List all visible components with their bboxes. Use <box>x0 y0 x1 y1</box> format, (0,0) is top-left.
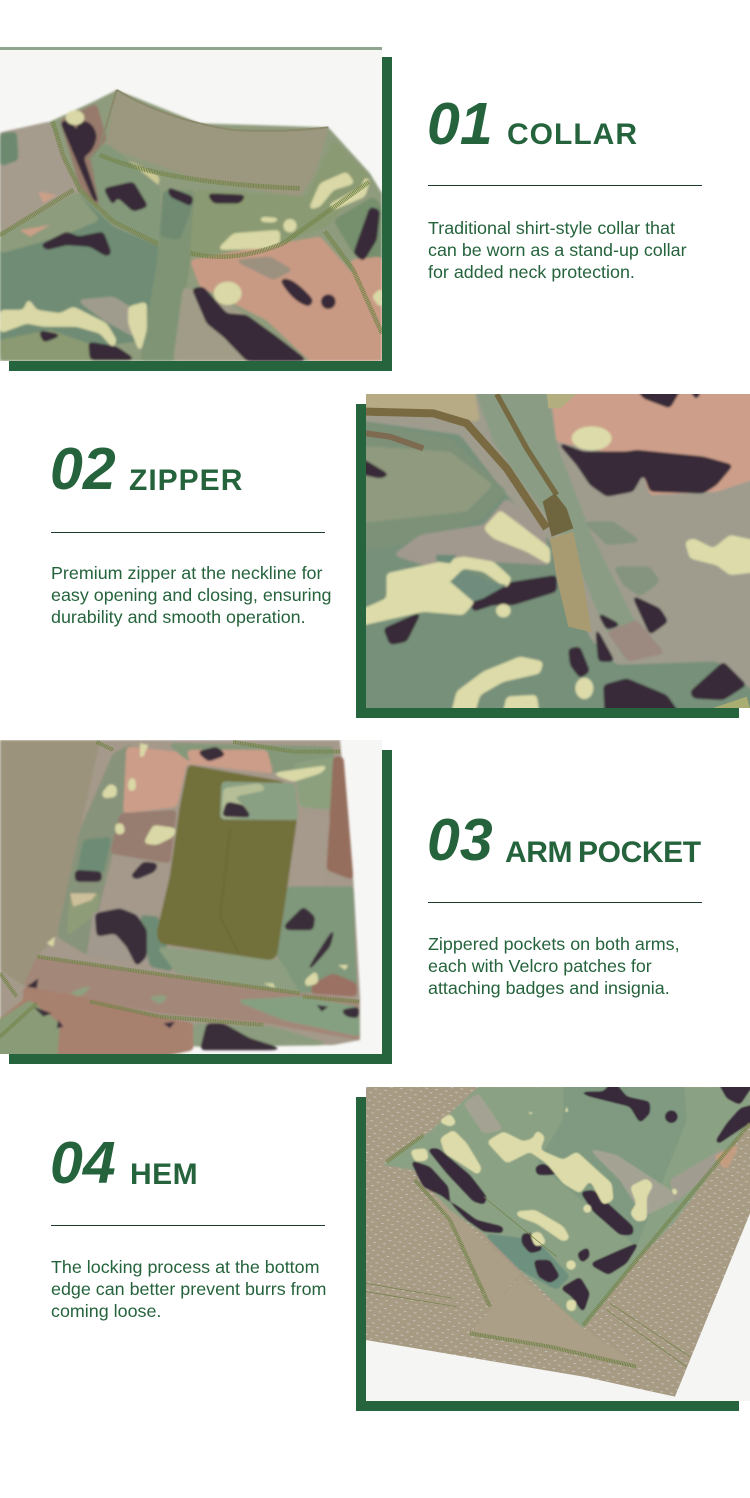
green offset frame right <box>382 57 392 371</box>
section 03: arm pocket <box>0 740 702 1064</box>
divider <box>51 532 325 533</box>
description: zipper: durability and smooth operation. <box>51 607 306 627</box>
mesh fabric <box>366 1087 750 1397</box>
heading: hem: HEM <box>130 1158 198 1191</box>
zipper slider <box>543 493 573 537</box>
green offset frame bottom <box>356 708 739 718</box>
photo: zipper <box>366 394 750 708</box>
number 01: 01 <box>427 91 493 157</box>
number 03: 03 <box>427 807 493 873</box>
heading: collar: COLLAR <box>507 118 638 151</box>
number 02: 02 <box>50 436 116 502</box>
green offset frame right <box>382 750 392 1064</box>
description: zipper: easy opening and closing, ensuring <box>51 585 332 605</box>
section 01: collar <box>0 47 702 371</box>
divider <box>51 1225 325 1226</box>
description: arm pocket <box>428 934 680 998</box>
description: collar: can be worn as a stand-up collar <box>428 240 687 260</box>
section 02: zipper <box>50 394 750 718</box>
description: arm pocket: attaching badges and insignia. <box>428 978 670 998</box>
description: arm pocket: each with Velcro patches for <box>428 956 652 976</box>
description: hem: edge can better prevent burrs from <box>51 1279 326 1299</box>
photo: collar <box>0 50 382 361</box>
green offset frame left <box>356 1097 366 1411</box>
photo: arm pocket <box>0 740 382 1054</box>
description: collar: for added neck protection. <box>428 262 635 282</box>
top accent bar <box>0 47 382 50</box>
zipper tape <box>366 412 547 528</box>
green offset frame left <box>356 404 366 718</box>
description: hem: The locking process at the bottom <box>51 1257 320 1277</box>
description: arm pocket: Zippered pockets on both arms, <box>428 934 680 954</box>
heading: arm pocket: ARM POCKET <box>505 836 701 869</box>
number 04: 04 <box>50 1130 116 1196</box>
green offset frame bottom <box>356 1401 739 1411</box>
zipper pull tab <box>550 532 592 632</box>
photo: hem <box>366 1087 750 1401</box>
divider <box>428 902 702 903</box>
section 04: hem <box>50 1087 750 1411</box>
description: hem <box>51 1257 326 1321</box>
heading: zipper: ZIPPER <box>129 464 243 497</box>
description: zipper <box>51 563 332 627</box>
description: collar: Traditional shirt-style collar that <box>428 218 675 238</box>
green offset frame bottom <box>9 361 392 371</box>
divider <box>428 185 702 186</box>
description: collar <box>428 218 687 282</box>
green offset frame bottom <box>9 1054 392 1064</box>
description: zipper: Premium zipper at the neckline for <box>51 563 322 583</box>
description: hem: coming loose. <box>51 1301 161 1321</box>
